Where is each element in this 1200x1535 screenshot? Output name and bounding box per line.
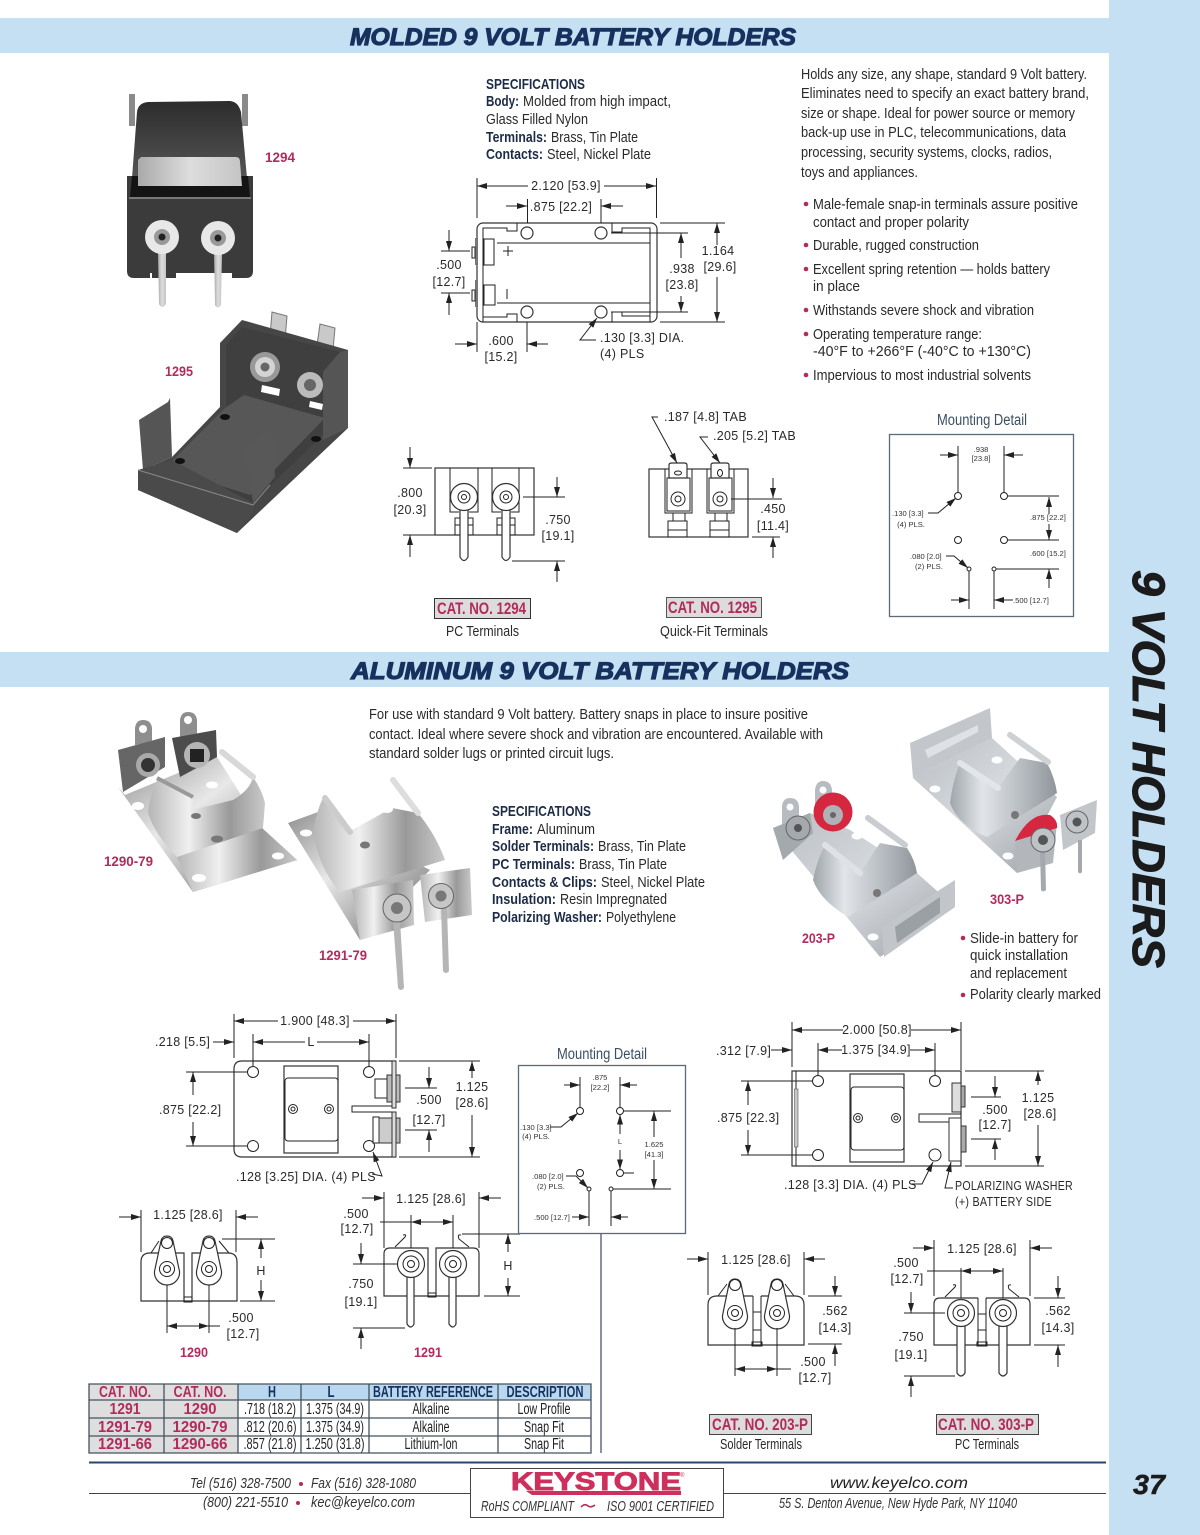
catalog label: 203-P: CAT. NO. 203-P (712, 1416, 808, 1434)
footer rules (89, 1462, 1106, 1464)
footer: phone and email: Tel (516) 328-7500 (190, 1475, 292, 1492)
specifications: molded: SPECIFICATIONS (486, 76, 585, 93)
bullet list: aluminum features: and replacement (970, 965, 1068, 982)
drawing: 1294 front view: [20.3] (393, 503, 427, 517)
specifications: molded: Brass, Tin Plate (551, 129, 638, 146)
photo: holder 1294 (127, 94, 253, 308)
caption: PC terminals 303-P: PC Terminals (955, 1437, 1019, 1453)
drawing: 303-P front view (890, 1240, 1075, 1397)
specifications: aluminum: Polarizing Washer: (492, 909, 602, 926)
drawing: 203-P/303-P top view: .128 [3.3] DIA. (4) PLS (784, 1178, 917, 1192)
specifications: aluminum: Contacts & Clips: (492, 874, 597, 891)
footer: website and address: www.keyelco.com (830, 1475, 968, 1492)
title: aluminum section: ALUMINUM 9 VOLT BATTERY HOLDERS (350, 658, 849, 685)
drawing: mounting detail molded: .600 [15.2] (1030, 549, 1066, 558)
page number: 37 (1133, 1469, 1166, 1500)
drawing: 1291 front view: .500 (343, 1207, 369, 1221)
drawing: 203-P/303-P top view: [12.7] (978, 1118, 1012, 1132)
specifications: aluminum: Steel, Nickel Plate (601, 874, 705, 891)
table row: 1291: .718 (18.2) (244, 1401, 296, 1418)
drawing: 1290/1291 top view: [12.7] (412, 1113, 446, 1127)
heading: mounting detail molded: Mounting Detail (937, 412, 1027, 429)
description: molded holders (801, 66, 1089, 181)
drawing: mounting detail aluminum: (2) PLS. (537, 1182, 565, 1191)
label: 1290-79: 1290-79 (104, 853, 153, 869)
side heading: 9 VOLT HOLDERS (1123, 570, 1174, 968)
description: molded holders: size or shape. Ideal for power source or memory (801, 105, 1075, 122)
bullet list: molded features: Male-female snap-in terminals assure positive (813, 196, 1078, 213)
specifications: aluminum: Solder Terminals: (492, 838, 594, 855)
drawing: mounting detail aluminum: (4) PLS. (522, 1132, 550, 1141)
table row: 1291-66: 1291-66 (98, 1436, 152, 1453)
drawing: 1290/1291 top view: .128 [3.25] DIA. (4) PLS (236, 1170, 376, 1184)
drawing: 203-P/303-P top view: 2.000 [50.8] (842, 1023, 912, 1037)
drawing: molded holder top view: 1.164 (702, 244, 734, 258)
drawing: molded holder top view: [23.8] (665, 278, 699, 292)
catalog label: 303-P: CAT. NO. 303-P (938, 1416, 1034, 1434)
table row: 1291-79: Snap Fit (524, 1419, 564, 1436)
drawing: 1291 front view: [12.7] (340, 1222, 374, 1236)
description: aluminum holders: contact. Ideal where severe shock and vibration are encountered. Available with (369, 726, 823, 743)
specifications: molded: Terminals: (486, 129, 547, 146)
table: part reference (89, 1384, 591, 1453)
table header row: H (268, 1384, 276, 1401)
logo: Keystone: ISO 9001 CERTIFIED (607, 1498, 714, 1515)
drawing: mounting detail molded: [23.8] (972, 454, 990, 463)
drawing: 203-P front view: [12.7] (798, 1371, 832, 1385)
drawing: 1290/1291 top view: .500 (416, 1093, 442, 1107)
drawing: 203-P/303-P top view: [28.6] (1023, 1107, 1057, 1121)
table row: 1291-66: Snap Fit (524, 1436, 564, 1453)
table row: 1291 (110, 1401, 570, 1418)
bullet list: molded features: in place (813, 278, 860, 295)
table header row: CAT. NO. (174, 1384, 226, 1401)
specifications: molded: Glass Filled Nylon (486, 111, 588, 128)
table row: 1291-79: Alkaline (412, 1419, 450, 1436)
specifications: aluminum: Frame: (492, 821, 533, 838)
drawing: 303-P front view: [12.7] (890, 1272, 924, 1286)
drawing: 303-P front view: [14.3] (1041, 1321, 1075, 1335)
bullet list: molded features: Withstands severe shock and vibration (813, 302, 1034, 319)
drawing: 1291 front view: [19.1] (344, 1295, 378, 1309)
drawing: 303-P front view: 1.125 [28.6] (947, 1242, 1017, 1256)
drawing: 1295 front view: .187 [4.8] TAB (664, 410, 747, 424)
logo: Keystone (470, 1468, 724, 1518)
specifications: molded: Steel, Nickel Plate (547, 146, 651, 163)
table row: 1291-66: Lithium-Ion (404, 1436, 458, 1453)
photo: holder 303-P (910, 708, 1097, 892)
description: aluminum holders: standard solder lugs or printed circuit lugs. (369, 745, 614, 762)
table row: 1291-79: 1290-79 (172, 1419, 228, 1436)
drawing: 1290/1291 top view: .218 [5.5] (155, 1035, 210, 1049)
drawing: 203-P front view: .500 (800, 1355, 826, 1369)
label: 1291: 1291 (414, 1344, 442, 1360)
drawing: 203-P/303-P top view: .500 (982, 1103, 1008, 1117)
table header row (99, 1384, 584, 1401)
panel: side tab (1109, 0, 1200, 1535)
table row: 1291-66 (98, 1436, 564, 1453)
label: 1295: 1295 (165, 363, 193, 379)
drawing: 1294 front view (393, 447, 575, 582)
drawing: 203-P front view: .562 (822, 1304, 848, 1318)
drawing: 1291 front view: .750 (348, 1277, 374, 1291)
specifications: aluminum: Brass, Tin Plate (579, 856, 667, 873)
caption: quick-fit terminals: Quick-Fit Terminals (660, 624, 768, 640)
bullet list: molded features (804, 196, 1078, 384)
specifications: aluminum: SPECIFICATIONS (492, 803, 591, 820)
drawing: molded holder top view: .500 (436, 258, 462, 272)
drawing: mounting detail aluminum: .130 [3.3] (520, 1123, 552, 1132)
drawing: mounting detail molded: .875 [22.2] (1030, 513, 1066, 522)
table row: 1291: 1290 (184, 1401, 216, 1418)
drawing: 1290/1291 top view: 1.900 [48.3] (280, 1014, 350, 1028)
panel: aluminum section header band (0, 652, 1109, 687)
drawing: 1291 front view (340, 1192, 520, 1349)
drawing: 203-P/303-P top view: 1.125 (1022, 1091, 1054, 1105)
footer: phone and email: kec@keyelco.com (311, 1494, 415, 1511)
specifications: aluminum: Polyethylene (606, 909, 676, 926)
footer: phone and email: Fax (516) 328-1080 (311, 1475, 417, 1492)
drawing: 1294 front view: .750 (545, 513, 571, 527)
footer: website and address (779, 1475, 1017, 1512)
photo: holder 1290-79 (118, 712, 297, 892)
drawing: 303-P front view: .562 (1045, 1304, 1071, 1318)
table row: 1291-79: 1.375 (34.9) (306, 1419, 364, 1436)
table header row: CAT. NO. (99, 1384, 151, 1401)
drawing: mounting detail aluminum: .080 [2.0] (532, 1172, 564, 1181)
specifications: aluminum: Brass, Tin Plate (598, 838, 686, 855)
drawing: mounting detail aluminum (518, 1066, 686, 1234)
description: molded holders: toys and appliances. (801, 164, 918, 181)
table row: 1291-66: 1290-66 (172, 1436, 228, 1453)
drawing: 303-P front view: .750 (898, 1330, 924, 1344)
table row: 1291-79: .812 (20.6) (244, 1419, 296, 1436)
drawing: 203-P/303-P top view: .312 [7.9] (716, 1044, 771, 1058)
drawing: 1295 front view: .205 [5.2] TAB (713, 429, 796, 443)
table row: 1291: 1291 (110, 1401, 141, 1418)
drawing: 303-P front view: .500 (893, 1256, 919, 1270)
drawing: 1295 front view (649, 410, 796, 558)
photo: holder 1295 (138, 312, 348, 533)
specifications: aluminum: Resin Impregnated (560, 891, 667, 908)
drawing: molded holder top view: [12.7] (432, 275, 466, 289)
description: aluminum holders: For use with standard 9 Volt battery. Battery snaps in place to insure positive (369, 706, 808, 723)
specifications: aluminum: Insulation: (492, 891, 556, 908)
drawing: 1291 front view: H (503, 1259, 513, 1273)
footer: website and address: 55 S. Denton Avenue, New Hyde Park, NY 11040 (779, 1495, 1017, 1512)
description: molded holders: processing, security systems, clocks, radios, (801, 144, 1052, 161)
drawing: 203-P front view: 1.125 [28.6] (721, 1253, 791, 1267)
drawing: 1294 front view: [19.1] (541, 529, 575, 543)
table row: 1291: Low Profile (518, 1401, 570, 1418)
bullet list: molded features: contact and proper polarity (813, 214, 969, 231)
caption: solder terminals: Solder Terminals (720, 1437, 802, 1453)
bullet list: aluminum features: quick installation (970, 947, 1068, 964)
table row: 1291: Alkaline (412, 1401, 450, 1418)
description: aluminum holders (369, 706, 823, 762)
catalog label: 1294: CAT. NO. 1294 (437, 600, 527, 618)
drawing: 203-P/303-P top view: .875 [22.3] (717, 1111, 779, 1125)
table row: 1291: 1.375 (34.9) (306, 1401, 364, 1418)
footer: phone and email (190, 1475, 417, 1511)
drawing: 1290/1291 top view (155, 1014, 489, 1184)
drawing: 1290/1291 top view: 1.125 (456, 1080, 488, 1094)
caption: PC terminals: PC Terminals (446, 624, 519, 640)
heading: mounting detail aluminum: Mounting Detail (557, 1046, 647, 1063)
drawing: molded holder top view: (4) PLS (600, 347, 644, 361)
label: 1290: 1290 (180, 1344, 208, 1360)
drawing: mounting detail aluminum: L (618, 1137, 622, 1146)
label: 303-P: 303-P (990, 891, 1024, 907)
drawing: mounting detail molded: .938 (974, 445, 988, 454)
bullet list: aluminum features: Slide-in battery for (970, 930, 1078, 947)
table row: 1291-79 (98, 1419, 564, 1436)
panel: molded section header band (0, 18, 1109, 53)
bullet list: molded features: Excellent spring retention — holds battery (813, 261, 1050, 278)
specifications: aluminum: PC Terminals: (492, 856, 575, 873)
drawing: 1290 front view: 1.125 [28.6] (153, 1208, 223, 1222)
drawing: molded holder top view: .130 [3.3] DIA. (600, 331, 684, 345)
drawing: 203-P/303-P top view: 1.375 [34.9] (841, 1043, 911, 1057)
table header row: BATTERY REFERENCE (373, 1384, 493, 1401)
description: molded holders: Eliminates need to specify an exact battery brand, (801, 85, 1089, 102)
specifications: molded: Contacts: (486, 146, 543, 163)
drawing: 1295 front view: [11.4] (757, 519, 789, 533)
table header row: DESCRIPTION (506, 1384, 584, 1401)
catalog label: 1295: CAT. NO. 1295 (668, 599, 757, 617)
specifications: molded: Molded from high impact, (523, 93, 671, 110)
photo: holder 1291-79 (288, 780, 472, 990)
photo: holder 203-P (773, 781, 955, 957)
description: molded holders: Holds any size, any shape, standard 9 Volt battery. (801, 66, 1087, 83)
drawing: mounting detail molded: .130 [3.3] (892, 509, 924, 518)
drawing: molded holder top view: .938 (669, 262, 695, 276)
drawing: 1290 front view (119, 1208, 275, 1341)
drawing: molded holder top view: 2.120 [53.9] (531, 179, 601, 193)
drawing: 303-P front view: [19.1] (894, 1348, 928, 1362)
table header row: L (328, 1384, 334, 1401)
table row: 1291-79: 1291-79 (98, 1419, 152, 1436)
bullet list: molded features: Operating temperature range: (813, 326, 982, 343)
drawing: 1290 front view: H (256, 1264, 266, 1278)
drawing: mounting detail aluminum: .875 (593, 1073, 607, 1082)
drawing: 203-P front view (687, 1252, 852, 1385)
description: molded holders: back-up use in PLC, telecommunications, data (801, 124, 1067, 141)
drawing: 203-P front view: [14.3] (818, 1321, 852, 1335)
drawing: 203-P/303-P top view (716, 1022, 1073, 1209)
drawing: 1291 front view: 1.125 [28.6] (396, 1192, 466, 1206)
title: molded section: MOLDED 9 VOLT BATTERY HOLDERS (350, 24, 796, 51)
table row: 1291-66: .857 (21.8) (244, 1436, 296, 1453)
logo: Keystone: KEYSTONE (511, 1468, 681, 1496)
drawing: mounting detail molded: .500 [12.7] (1013, 596, 1049, 605)
drawing: molded holder top view (432, 178, 737, 364)
drawing: 1290 front view: .500 (228, 1311, 254, 1325)
drawing: mounting detail molded: (2) PLS. (915, 562, 943, 571)
drawing: mounting detail molded: .080 [2.0] (910, 552, 942, 561)
bullet list: molded features: Impervious to most industrial solvents (813, 367, 1031, 384)
drawing: mounting detail aluminum: [22.2] (590, 1083, 610, 1092)
specifications: aluminum (492, 803, 705, 926)
drawing: 1290/1291 top view: [28.6] (455, 1096, 489, 1110)
drawing: mounting detail molded: (4) PLS. (897, 520, 925, 529)
specifications: aluminum: Aluminum (537, 821, 595, 838)
label: 1294: 1294 (265, 149, 295, 165)
logo: Keystone: ® (680, 1472, 685, 1479)
specifications: molded (486, 76, 671, 163)
bullet list: aluminum features (961, 930, 1101, 1003)
drawing: molded holder top view: .875 [22.2] (530, 200, 592, 214)
drawing: mounting detail aluminum: [41.3] (644, 1150, 664, 1159)
bullet list: aluminum features: Polarity clearly marked (970, 986, 1101, 1003)
drawing: 1290 front view: [12.7] (226, 1327, 260, 1341)
vertical divider (600, 1234, 602, 1453)
drawing: mounting detail molded (890, 434, 1074, 616)
drawing: 203-P/303-P top view: (+) BATTERY SIDE (955, 1195, 1052, 1209)
label: 203-P: 203-P (802, 930, 835, 946)
drawing: 1294 front view: .800 (397, 486, 423, 500)
logo: Keystone: RoHS COMPLIANT (481, 1498, 575, 1515)
footer: phone and email: (800) 221-5510 (203, 1494, 289, 1511)
drawing: 1290/1291 top view: L (307, 1035, 315, 1049)
drawing: molded holder top view: [15.2] (484, 350, 518, 364)
drawing: mounting detail aluminum: .500 [12.7] (534, 1213, 570, 1222)
drawing: 1290/1291 top view: .875 [22.2] (159, 1103, 221, 1117)
label: 1291-79: 1291-79 (319, 947, 367, 963)
drawing: molded holder top view: .600 (488, 334, 514, 348)
table row: 1291-66: 1.250 (31.8) (306, 1436, 364, 1453)
bullet list: molded features: -40°F to +266°F (-40°C to +130°C) (813, 343, 1031, 360)
bullet list: molded features: Durable, rugged construction (813, 237, 979, 254)
specifications: molded: Body: (486, 93, 519, 110)
drawing: 1295 front view: .450 (760, 502, 786, 516)
drawing: molded holder top view: [29.6] (703, 260, 737, 274)
drawing: mounting detail aluminum: 1.625 (644, 1140, 664, 1149)
drawing: 203-P/303-P top view: POLARIZING WASHER (955, 1179, 1073, 1193)
